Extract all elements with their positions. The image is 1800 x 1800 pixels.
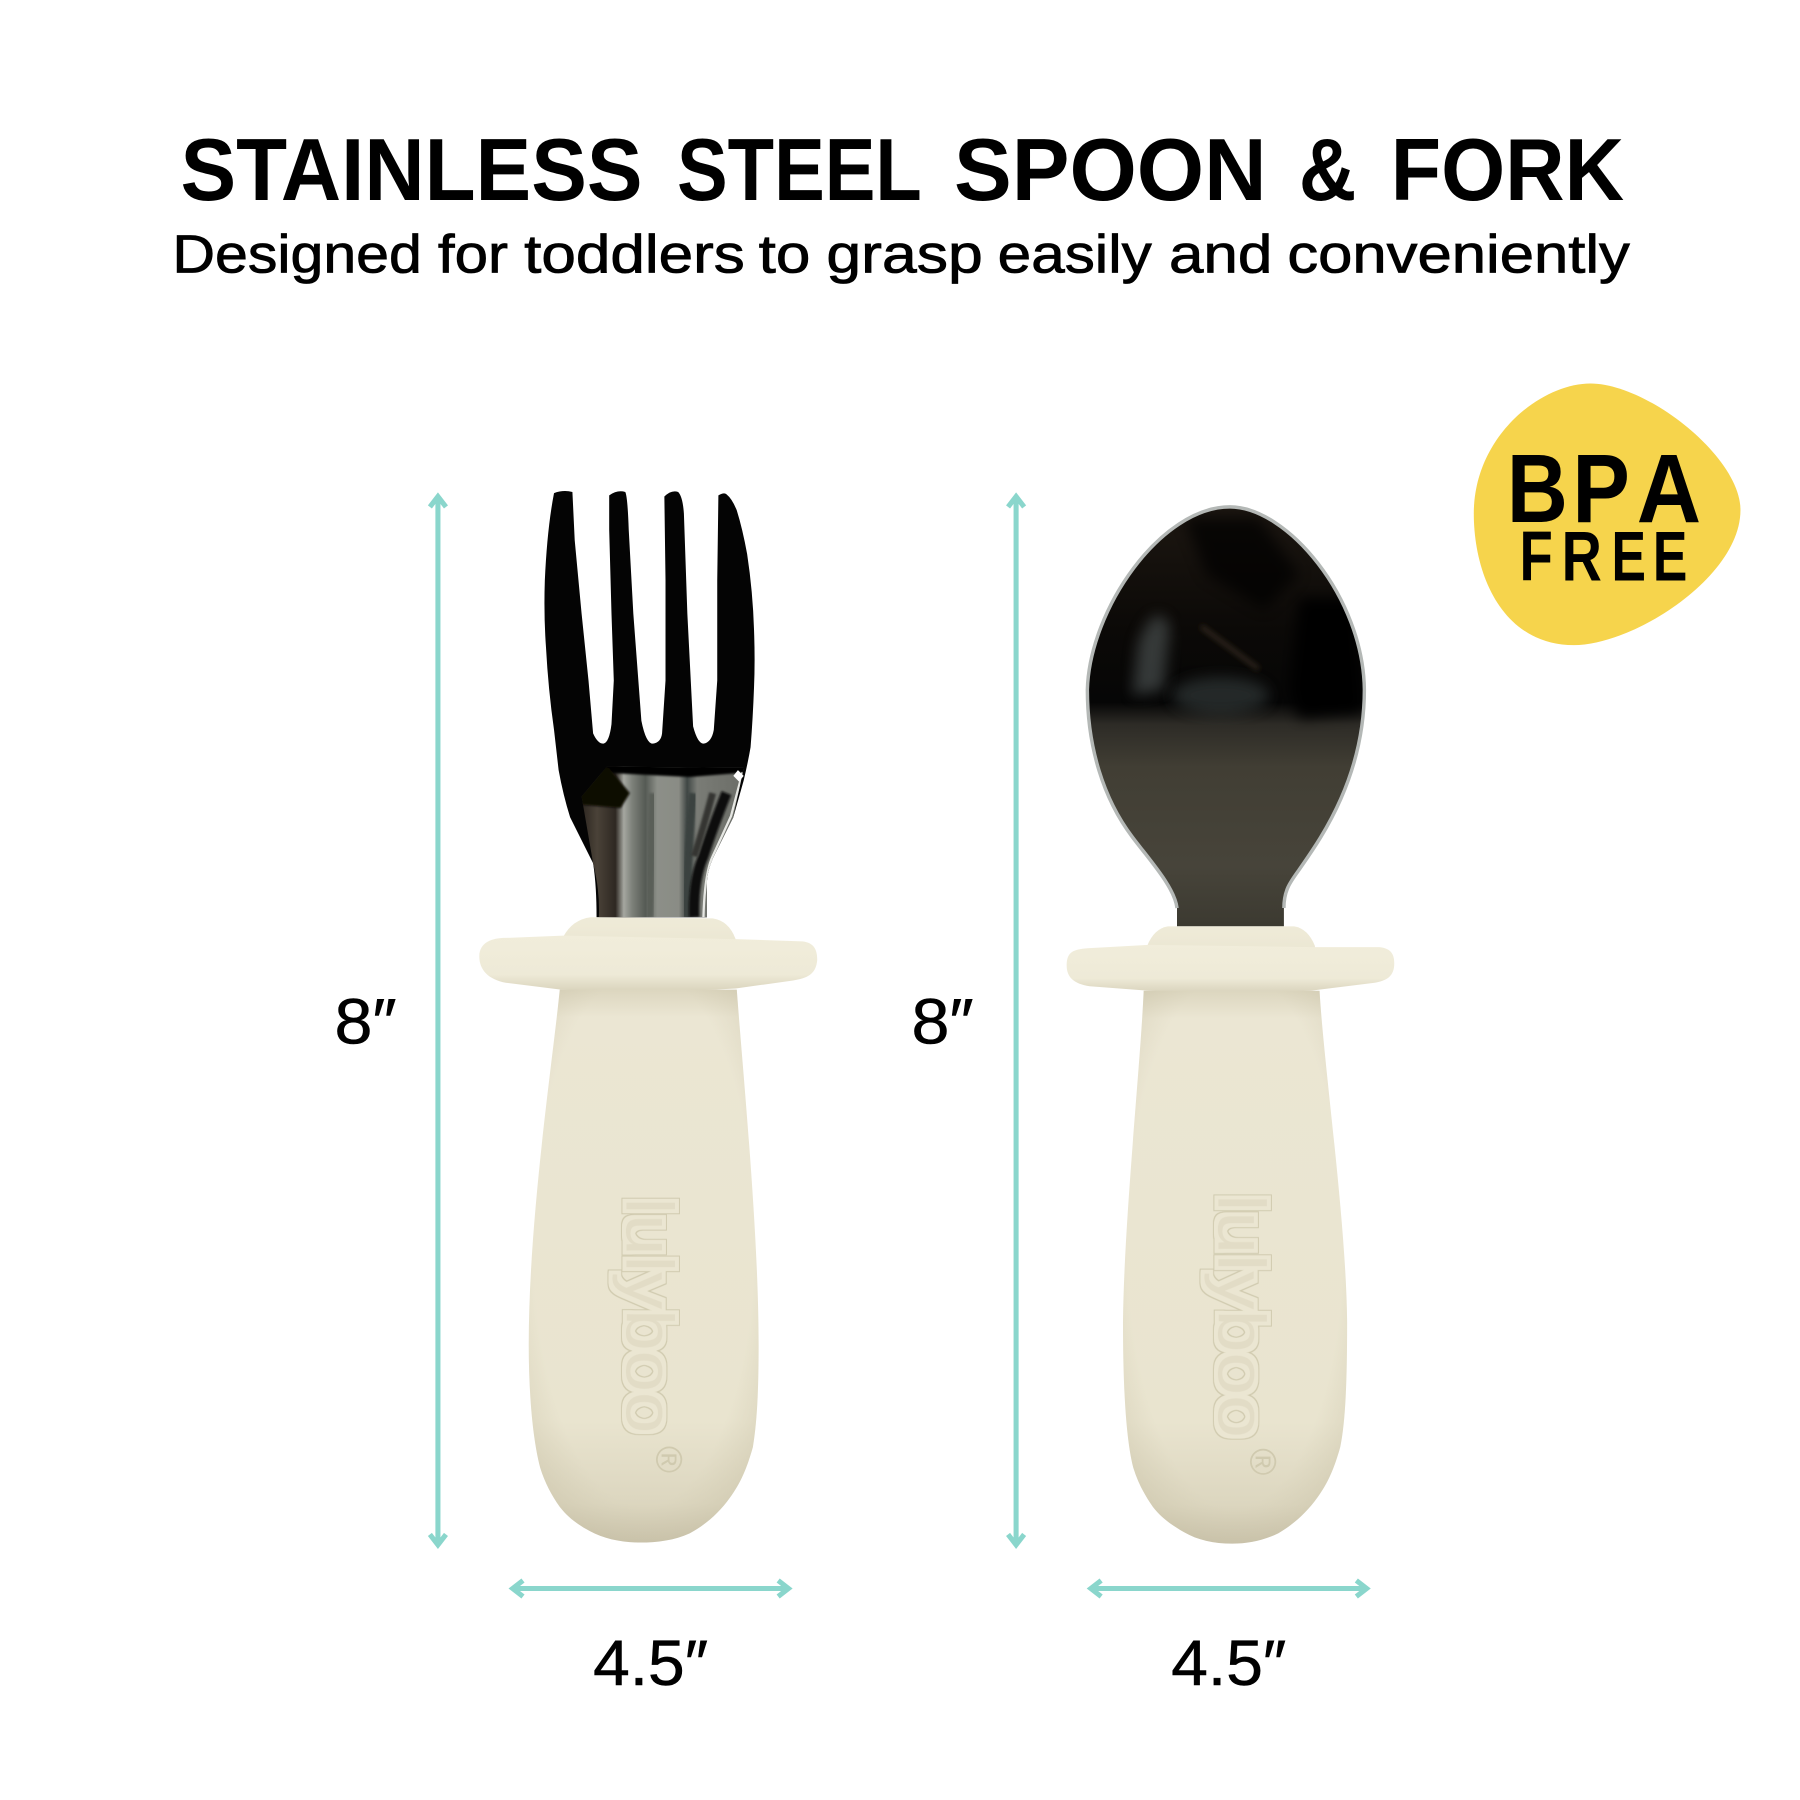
spoon handle edge shading bbox=[1123, 991, 1347, 1544]
badge text: FREE: F bbox=[1520, 517, 1553, 595]
label: spoon width: 4.5″ bbox=[1171, 1627, 1286, 1699]
fork head and tines bbox=[544, 491, 755, 917]
spoon handle bbox=[1123, 991, 1347, 1544]
subtitle: to bbox=[759, 224, 810, 284]
arrow: fork width bbox=[513, 1580, 789, 1597]
arrow: spoon width bbox=[1091, 1580, 1367, 1597]
title: STEEL bbox=[677, 120, 922, 219]
title bbox=[180, 120, 1624, 219]
label: fork width: 4.5″ bbox=[593, 1627, 708, 1699]
fork collar bbox=[563, 917, 736, 960]
subtitle: grasp bbox=[826, 224, 983, 284]
subtitle bbox=[172, 224, 1630, 284]
label: spoon height: 8″ bbox=[911, 986, 974, 1058]
arrow: spoon height bbox=[1008, 497, 1024, 1545]
fork neck chrome reflections bbox=[582, 766, 744, 918]
spoon flange bbox=[1067, 945, 1394, 993]
embossed registered mark: ® bbox=[648, 1446, 689, 1473]
arrow: fork height bbox=[430, 497, 446, 1545]
spoon illustration bbox=[1067, 500, 1394, 1544]
title: STAINLESS bbox=[180, 120, 643, 219]
badge text: FREE bbox=[1520, 517, 1687, 595]
title: FORK bbox=[1391, 120, 1624, 219]
badge text: BPA: B bbox=[1507, 434, 1568, 543]
badge blob bbox=[1474, 383, 1740, 645]
subtitle: toddlers bbox=[524, 224, 745, 284]
spoon chrome rim bbox=[1087, 507, 1364, 908]
fork illustration bbox=[479, 491, 817, 1543]
subtitle: easily bbox=[998, 224, 1152, 284]
title: SPOON bbox=[954, 120, 1267, 219]
fork flange bbox=[479, 936, 817, 991]
embossed registered mark: ® bbox=[1243, 1448, 1284, 1475]
fork handle bbox=[529, 990, 759, 1543]
badge text: FREE: E bbox=[1611, 517, 1646, 595]
subtitle: for bbox=[438, 224, 508, 284]
label: fork height: 8″ bbox=[334, 986, 397, 1058]
spoon bowl bbox=[1080, 500, 1374, 931]
badge text: FREE: E bbox=[1653, 517, 1687, 595]
embossed logo: lulyboo: lulyboo bbox=[1203, 1194, 1277, 1438]
title: & bbox=[1299, 120, 1356, 219]
subtitle: conveniently bbox=[1287, 224, 1630, 284]
badge text: BPA bbox=[1507, 434, 1701, 543]
badge text: BPA: P bbox=[1572, 434, 1630, 543]
badge text: FREE: R bbox=[1562, 517, 1602, 595]
subtitle: and bbox=[1169, 224, 1272, 284]
embossed logo: lulyboo: lulyboo bbox=[611, 1198, 685, 1433]
fork handle edge shading bbox=[529, 990, 759, 1543]
badge text: BPA: A bbox=[1637, 434, 1701, 543]
subtitle: Designed bbox=[172, 224, 422, 284]
badge: BPA free bbox=[1474, 383, 1740, 645]
fork highlight glint bbox=[733, 770, 744, 782]
spoon collar bbox=[1147, 926, 1315, 966]
